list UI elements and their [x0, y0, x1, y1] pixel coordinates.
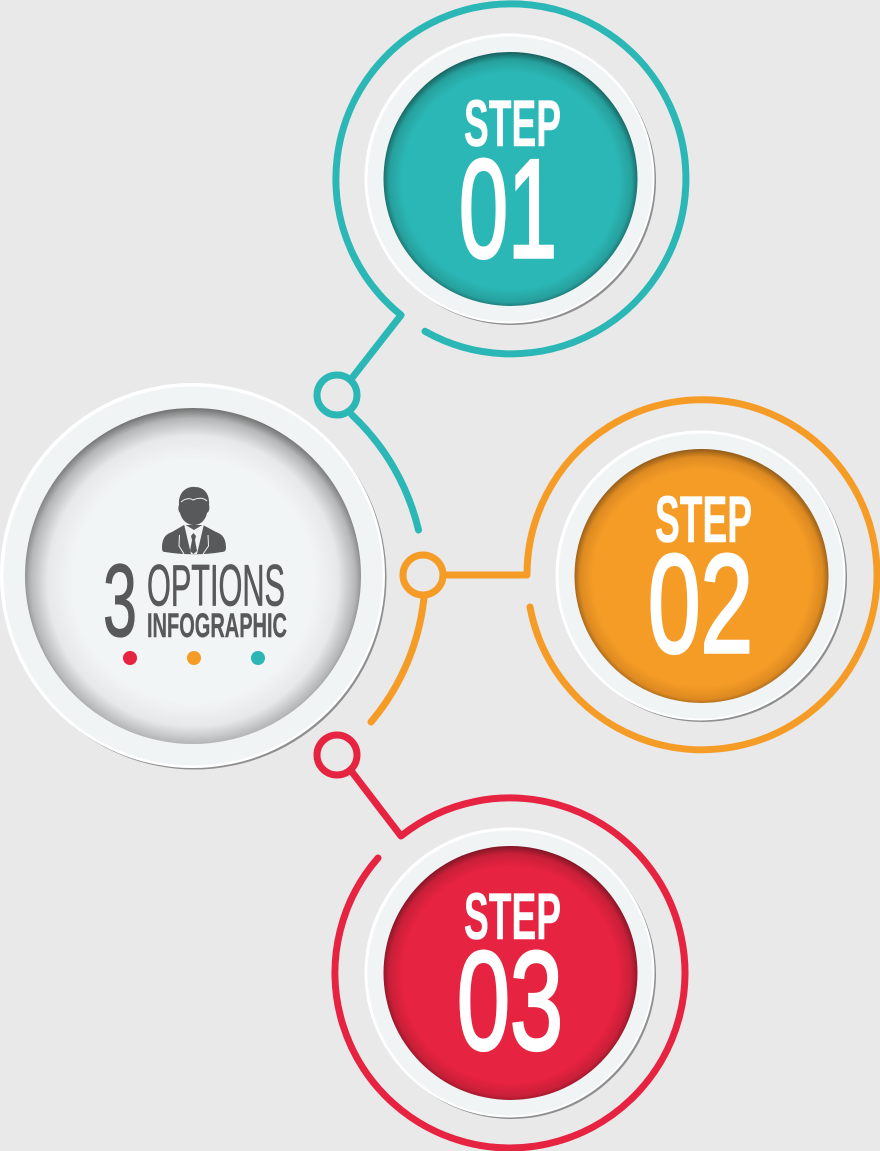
heading OPTIONS: OPTIONS: [147, 554, 285, 618]
connector: red node: [317, 735, 357, 775]
panel: step 03: [335, 772, 685, 1148]
label STEP: STEP: [655, 482, 752, 556]
heading numeral 3: 3: [103, 543, 137, 658]
orange outer ring: [445, 400, 877, 750]
label STEP: STEP: [464, 86, 561, 160]
connector: orange node, arc: [371, 555, 443, 722]
white bezel: [364, 828, 656, 1119]
central panel: 3 options infographic: [0, 383, 386, 770]
number 01: 01: [459, 130, 557, 287]
connector: teal arc, node and line to step 01: [317, 375, 418, 530]
label STEP: STEP: [464, 879, 561, 953]
red outer ring: [335, 772, 685, 1148]
white bezel: [556, 430, 847, 722]
legend dots: [123, 651, 265, 665]
number 02: 02: [648, 525, 753, 682]
icon: businessman: [162, 487, 226, 554]
orange disc: [574, 449, 828, 703]
panel: step 01: [336, 4, 686, 378]
heading INFOGRAPHIC: INFOGRAPHIC: [147, 607, 287, 645]
white bezel: [364, 34, 656, 325]
red disc: [384, 846, 638, 1100]
teal disc: [384, 52, 638, 306]
number 03: 03: [457, 922, 563, 1079]
panel: step 02: [445, 400, 877, 750]
teal outer ring: [336, 4, 686, 378]
